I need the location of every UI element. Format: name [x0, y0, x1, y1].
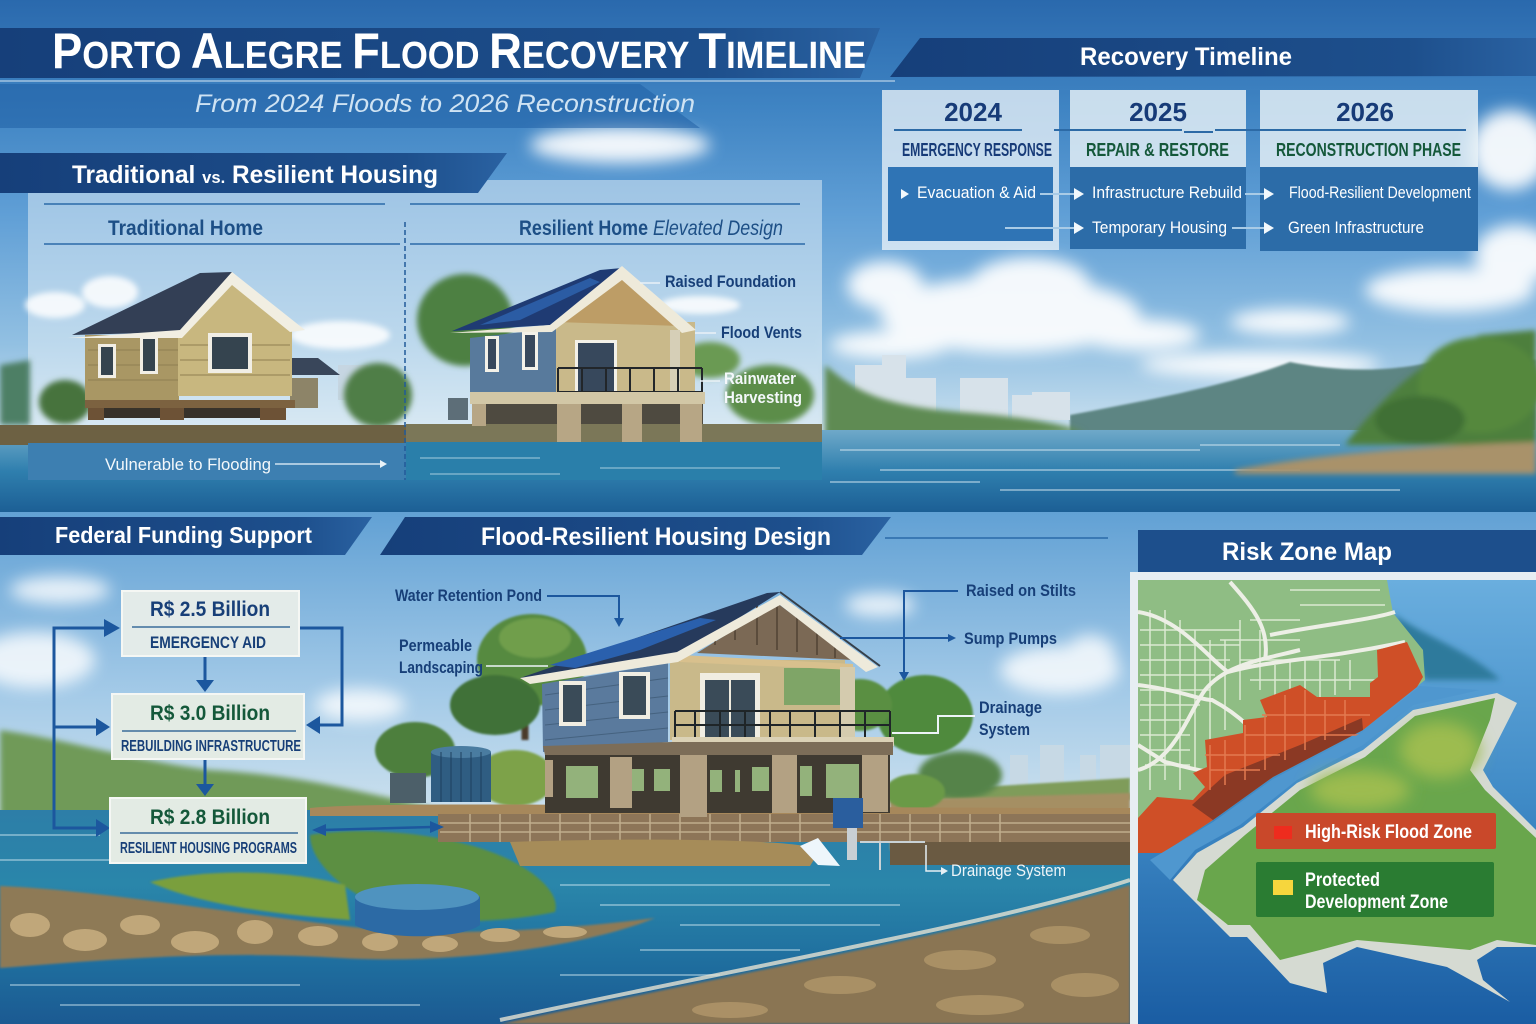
funding box 2: R$ 3.0 Billion: [150, 702, 270, 725]
callout: raised on stilts: Raised on Stilts: [966, 581, 1076, 600]
column 2025: 2025: [1129, 97, 1187, 127]
column 2026: Flood-Resilient Development: [1289, 183, 1471, 202]
callouts: resilient home features: Rainwater: [724, 369, 796, 388]
caption: vulnerable to flooding: [105, 455, 387, 474]
callouts: resilient home features: Harvesting: [724, 388, 802, 407]
map legend: high-risk flood zone: High-Risk Flood Zone: [1305, 822, 1472, 843]
front wall: [670, 660, 845, 740]
column 2024: [882, 90, 1059, 250]
heading: traditional home: Traditional Home: [108, 217, 263, 240]
map: protected land: [1173, 693, 1536, 1002]
map legend: protected development zone: [1256, 862, 1494, 917]
panel: recovery timeline: [882, 90, 1478, 251]
heading: traditional vs resilient housing: [0, 153, 507, 193]
map legend: protected development zone: Development Zone: [1305, 892, 1448, 913]
panel: traditional vs resilient housing: [0, 180, 822, 480]
heading: federal funding support: [0, 517, 372, 555]
callout: permeable landscaping: Permeable: [399, 636, 472, 655]
gable: [697, 603, 853, 660]
illustration: flood-resilient house: [0, 592, 1130, 968]
funding box 1: R$ 2.5 Billion: [150, 598, 270, 621]
funding box 2: REBUILDING INFRASTRUCTURE: [121, 738, 301, 755]
callout: drainage system lower: Drainage System: [951, 861, 1066, 880]
traditional house illustration: [68, 272, 340, 420]
callout: drainage system lower: [926, 845, 1066, 880]
column 2024: 2024: [944, 97, 1002, 127]
column 2026: [1184, 90, 1478, 251]
callout: drainage system upper: [892, 698, 1042, 739]
double arrow to housing: [312, 821, 444, 836]
funding box 3: R$ 2.8 Billion: [150, 806, 270, 829]
blue wall: [542, 663, 668, 752]
callout: sump pumps: Sump Pumps: [964, 629, 1057, 648]
heading: flood-resilient housing design: [380, 517, 1108, 555]
map legend: high-risk flood zone: [1256, 813, 1496, 849]
map: city land: [1138, 580, 1425, 853]
heading: traditional vs resilient housing: Traditional vs. Resilient Housing: [72, 161, 438, 189]
garden and shore land: [0, 831, 655, 968]
caption: vulnerable to flooding: Vulnerable to Flooding: [105, 455, 271, 474]
windows and door: [559, 672, 760, 737]
funding box 3: RESILIENT HOUSING PROGRAMS: [120, 840, 297, 857]
column 2025: Temporary Housing: [1092, 218, 1227, 237]
recovery timeline header: Recovery Timeline: [1080, 43, 1292, 71]
callouts: resilient home features: [640, 272, 802, 407]
diagram: federal funding flow: [54, 591, 444, 863]
porch column: [840, 667, 855, 739]
map: high-risk flood zone: [1138, 642, 1423, 853]
callout: raised on stilts: [899, 581, 1076, 681]
pillars: [545, 755, 888, 817]
column 2025: Infrastructure Rebuild: [1092, 183, 1242, 202]
heading: risk zone map: [1138, 530, 1536, 572]
heading: federal funding support: Federal Funding Support: [55, 522, 312, 548]
funding box 1: [122, 591, 299, 656]
column 2025: REPAIR & RESTORE: [1086, 140, 1229, 160]
under-house shadow: [545, 755, 890, 813]
heading: flood-resilient housing design: Flood-Resilient Housing Design: [481, 523, 831, 551]
retention pond basin: [355, 884, 480, 936]
callout: permeable landscaping: Landscaping: [399, 658, 483, 677]
callout: water retention pond: [395, 586, 624, 627]
pump box and pipe: [800, 798, 925, 870]
callout: permeable landscaping: [399, 636, 548, 677]
deck: [672, 737, 894, 746]
column 2024: EMERGENCY RESPONSE: [902, 140, 1052, 160]
heading: resilient home: Resilient Home Elevated Design: [519, 217, 783, 240]
subtitle: From 2024 Floods to 2026 Reconstruction: [195, 90, 695, 118]
callouts: resilient home features: Flood Vents: [721, 323, 802, 342]
resilient house illustration: [448, 266, 705, 442]
callouts: resilient home features: Raised Foundation: [665, 272, 796, 291]
callout: sump pumps: [840, 629, 1057, 648]
column 2026: RECONSTRUCTION PHASE: [1276, 140, 1461, 160]
funding box 3: [110, 798, 306, 863]
recovery timeline header: [890, 38, 1536, 77]
callouts: housing design features: [395, 581, 1076, 880]
water tank: [390, 746, 491, 803]
map: river: [1150, 686, 1480, 880]
heading: risk zone map: Risk Zone Map: [1222, 538, 1392, 566]
trees: [375, 614, 973, 810]
funding box 1: EMERGENCY AID: [150, 633, 266, 652]
railing: [675, 711, 890, 738]
shoreline stones: [10, 913, 587, 953]
column 2026: Green Infrastructure: [1288, 218, 1424, 237]
callout: drainage system upper: System: [979, 720, 1030, 739]
column 2025: [1005, 90, 1246, 249]
callout: drainage system upper: Drainage: [979, 698, 1042, 717]
column 2026: 2026: [1336, 97, 1394, 127]
title: PORTO ALEGRE FLOOD RECOVERY TIMELINE: [52, 23, 866, 79]
callout: water retention pond: Water Retention Pond: [395, 586, 542, 605]
roof with solar panels: [520, 592, 780, 678]
map legend: protected development zone: Protected: [1305, 870, 1380, 891]
panel: risk zone map: [1130, 572, 1536, 1024]
title banner: [0, 23, 895, 128]
funding box 2: [112, 694, 304, 759]
stone retaining wall: [310, 804, 1130, 866]
column 2024: Evacuation & Aid: [917, 183, 1036, 202]
